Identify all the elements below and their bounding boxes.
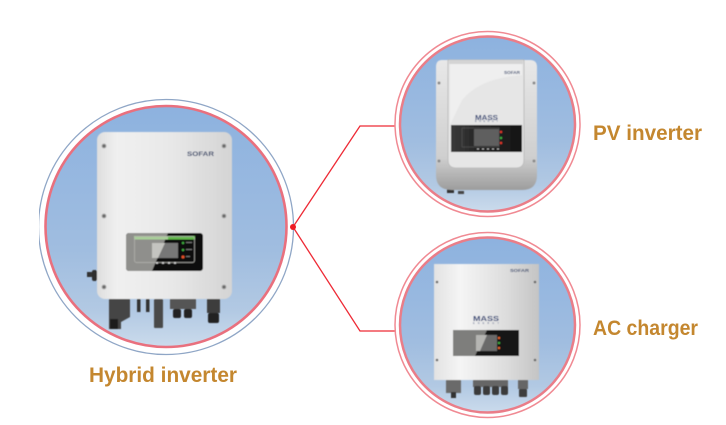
- brand subtitle: ENERGY: [473, 322, 499, 325]
- icon: hybrid inverter: [87, 132, 232, 329]
- heading: AC charger: AC charger: [593, 317, 698, 340]
- brand subtitle: ENERGY: [475, 120, 498, 123]
- display panel: [451, 125, 522, 152]
- icon: AC charger: [434, 264, 539, 398]
- icon: PV inverter: [436, 60, 537, 194]
- panel: PV inverter circle: [395, 32, 580, 216]
- connector lines: [293, 126, 396, 331]
- brand: MASS: [475, 115, 498, 122]
- display panel: [453, 330, 519, 356]
- panel: AC charger circle: [395, 232, 580, 418]
- logo: SOFAR: [510, 268, 530, 273]
- panel: hybrid inverter circle: [30, 100, 294, 354]
- heading: Hybrid inverter: Hybrid inverter: [89, 364, 237, 387]
- connector junction dot: [290, 224, 296, 230]
- heading: PV inverter: PV inverter: [593, 122, 702, 145]
- brand: MASS: [473, 316, 499, 323]
- display panel: [126, 233, 203, 271]
- logo: SOFAR: [504, 70, 521, 75]
- logo: SOFAR: [187, 151, 214, 158]
